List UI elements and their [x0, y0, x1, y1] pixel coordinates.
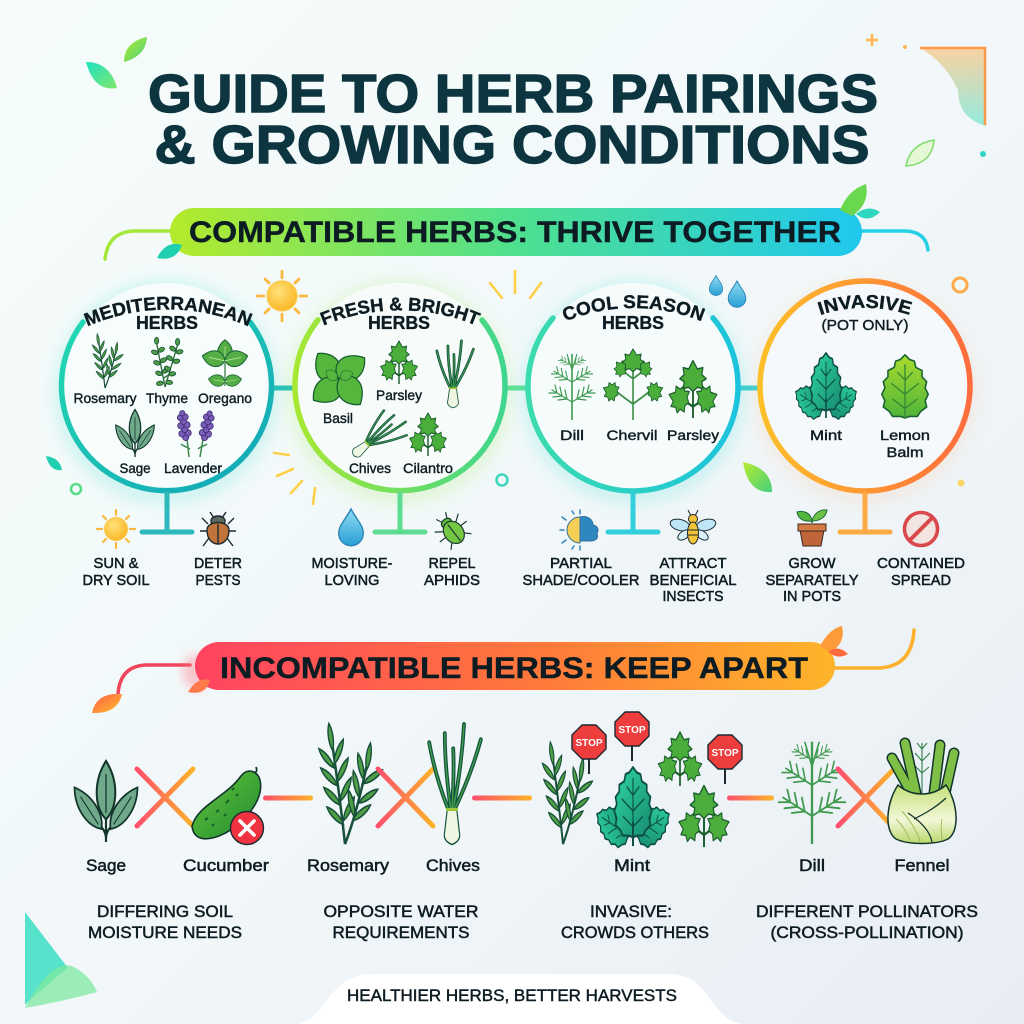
panel: invasive herbs: [749, 278, 978, 505]
footer tab: [298, 974, 742, 1024]
trait: partial shade: SHADE/COOLER: [522, 572, 640, 589]
trait: attract beneficial insects: BENEFICIAL: [650, 572, 736, 589]
herb: rosemary: [74, 333, 136, 406]
label: fennel: Fennel: [894, 856, 950, 875]
reason: dill and fennel: [756, 903, 978, 942]
herb: basil: Basil: [323, 410, 353, 426]
heading: invasive pot only: (POT ONLY): [822, 317, 908, 334]
reason: mint: CROWDS OTHERS: [561, 924, 709, 942]
trait: attract beneficial insects: INSECTS: [662, 588, 724, 605]
herb: mint: Mint: [810, 427, 842, 443]
panel: mediterranean herbs: [48, 274, 284, 510]
ring fill: cool season: [530, 283, 736, 489]
decorative: sun, sparks, droplets, dots: [46, 271, 967, 504]
title: GUIDE TO HERB PAIRINGS: [148, 64, 878, 124]
icon: sage: [68, 761, 144, 842]
heading: mediterranean herbs: HERBS: [136, 312, 198, 333]
reason: mint: [561, 903, 709, 942]
trait: deter pests: PESTS: [196, 572, 240, 589]
trait: grow separately in pots: SEPARATELY: [766, 572, 858, 589]
trait: moisture loving: [312, 509, 392, 589]
trait: sun and dry soil: [82, 510, 150, 589]
ring fill: mediterranean: [63, 283, 269, 489]
link between pairs: [263, 796, 774, 800]
herb: sage: [112, 410, 158, 476]
icon: parsley lower: [675, 786, 733, 847]
panel: cool season herbs: [516, 274, 750, 510]
reason: rosemary and chives: REQUIREMENTS: [332, 924, 470, 942]
herb: oregano: [198, 340, 252, 406]
icon: dill: [779, 742, 845, 844]
icon: stop sign centre: [615, 712, 649, 761]
banner: incompatible herbs: [92, 626, 914, 713]
icon: mint large: [591, 767, 675, 852]
herb: parsley: Parsley: [667, 427, 719, 443]
heading: invasive pot only: [817, 294, 912, 334]
pair: sage and cucumber: [68, 761, 269, 942]
banner: compatible herbs: COMPATIBLE HERBS: THRIVE TOGETHER: [189, 216, 841, 249]
ring: mediterranean: [62, 322, 272, 491]
trait: attract beneficial insects: ATTRACT: [660, 555, 726, 572]
heading: fresh and bright herbs: FRESH & BRIGHT: [320, 297, 482, 326]
herb: cilantro: Cilantro: [403, 460, 453, 476]
reason: dill and fennel: DIFFERENT POLLINATORS: [756, 903, 978, 921]
icon: stop sign left: STOP: [575, 738, 603, 749]
trait: contained spread: CONTAINED: [877, 555, 965, 572]
trait: deter pests: DETER: [194, 555, 242, 572]
trait connectors under circles: [142, 494, 890, 532]
heading: mediterranean herbs: MEDITERRANEAN: [84, 296, 253, 326]
cross: rosemary and chives: [378, 769, 433, 826]
icon: cucumber: [192, 767, 261, 839]
banner: compatible herbs: [105, 184, 928, 259]
herb: thyme: [146, 337, 188, 406]
heading: invasive pot only: INVASIVE: [817, 294, 912, 315]
ring: invasive: [760, 281, 970, 491]
trait: attract beneficial insects: [650, 510, 736, 605]
pair: rosemary and chives: [307, 723, 481, 942]
decorative leaves and sparkles: top: [86, 34, 986, 166]
reason: dill and fennel: (CROSS-POLLINATION): [770, 924, 964, 942]
ring: fresh and bright: [295, 320, 505, 491]
reason: rosemary and chives: [324, 903, 479, 942]
herb: thyme: Thyme: [146, 390, 188, 406]
ring glow: fresh and bright: [296, 289, 502, 495]
icon: stop sign right: STOP: [711, 748, 739, 759]
icon: rosemary: [317, 723, 384, 844]
herb: cilantro: [403, 413, 453, 476]
herb: dill: [549, 354, 595, 443]
herb: oregano: Oregano: [198, 390, 252, 406]
herb: sage: Sage: [120, 460, 151, 476]
cross: sage and cucumber: [137, 769, 193, 826]
trait: repel aphids: [424, 505, 480, 589]
trait: sun and dry soil: DRY SOIL: [82, 572, 150, 589]
panel: fresh and bright herbs: [282, 274, 516, 510]
icon: chives: [429, 724, 481, 845]
ring glow: cool season: [530, 289, 736, 495]
label: sage: Sage: [86, 856, 126, 875]
trait: partial shade: [522, 510, 640, 589]
label: dill: Dill: [799, 856, 825, 875]
herb: lemon balm: [880, 355, 930, 460]
reason: sage and cucumber: MOISTURE NEEDS: [88, 924, 242, 942]
ring glow: mediterranean: [63, 289, 269, 495]
trait: repel aphids: REPEL: [428, 555, 476, 572]
cross: dill and fennel: [838, 769, 892, 826]
decorative corner leaves bottom left: [25, 912, 97, 1008]
herb: lavender: Lavender: [164, 460, 222, 476]
trait: deter pests: [194, 512, 242, 589]
herb: chervil: Chervil: [606, 427, 658, 443]
trait: moisture loving: LOVING: [324, 572, 380, 589]
herb: chives: Chives: [349, 460, 391, 476]
herb: lavender: [164, 410, 222, 476]
label: rosemary: Rosemary: [307, 856, 390, 875]
heading: cool season herbs: [562, 295, 706, 333]
trait: grow separately in pots: IN POTS: [783, 588, 841, 605]
title: [148, 64, 878, 175]
trait: sun and dry soil: SUN &: [94, 555, 138, 572]
reason: mint: INVASIVE:: [590, 903, 672, 921]
herb: lemon balm: Lemon: [880, 427, 930, 443]
reason: sage and cucumber: [88, 903, 242, 942]
pair: mint crowding others: [541, 712, 742, 942]
label: mint: Mint: [614, 856, 650, 875]
reason: rosemary and chives: OPPOSITE WATER: [324, 903, 479, 921]
herb: dill: Dill: [560, 427, 584, 443]
ring: cool season: [528, 318, 738, 491]
connectors between circles: [272, 386, 758, 390]
herb: mint: [791, 353, 861, 443]
label: chives: Chives: [426, 856, 480, 875]
heading: cool season herbs: COOL SEASON: [562, 295, 706, 322]
herb: chives: [344, 405, 413, 476]
banner: incompatible herbs: INCOMPATIBLE HERBS: KEEP APART: [220, 652, 808, 685]
ring fill: fresh and bright: [296, 283, 502, 489]
ring fill: invasive: [762, 283, 968, 489]
ring glow: invasive: [762, 289, 968, 495]
icon: parsley upper: [655, 732, 705, 786]
reason: sage and cucumber: DIFFERING SOIL: [97, 903, 233, 921]
herb: basil: [307, 347, 371, 426]
icon: stop sign left: [572, 725, 606, 774]
pair: dill and fennel: [756, 742, 978, 942]
trait: partial shade: PARTIAL: [550, 555, 612, 572]
icon: red x badge: [230, 812, 264, 844]
herb: parsley: [666, 361, 720, 443]
icon: rosemary small: [541, 742, 593, 844]
heading: cool season herbs: HERBS: [602, 312, 664, 333]
trait: grow separately in pots: [766, 510, 858, 605]
herb: chervil: [600, 349, 666, 443]
herb: lemon balm: Balm: [886, 444, 924, 460]
herb: rosemary: Rosemary: [74, 390, 136, 406]
heading: fresh and bright herbs: HERBS: [368, 312, 430, 333]
trait: moisture loving: MOISTURE-: [312, 555, 392, 572]
trait: contained spread: SPREAD: [891, 572, 951, 589]
trait: repel aphids: APHIDS: [424, 572, 480, 589]
trait: contained spread: [877, 512, 965, 589]
icon: fennel: [888, 743, 956, 844]
herb: upright chives: [437, 341, 473, 408]
footer tab: HEALTHIER HERBS, BETTER HARVESTS: [347, 987, 677, 1005]
herb: parsley: Parsley: [376, 387, 422, 403]
trait: grow separately in pots: GROW: [788, 555, 836, 572]
label: cucumber: Cucumber: [183, 856, 269, 875]
icon: stop sign right: [708, 735, 742, 784]
icon: stop sign centre: STOP: [618, 725, 646, 736]
herb: parsley: [376, 341, 422, 403]
title: & GROWING CONDITIONS: [154, 115, 870, 175]
